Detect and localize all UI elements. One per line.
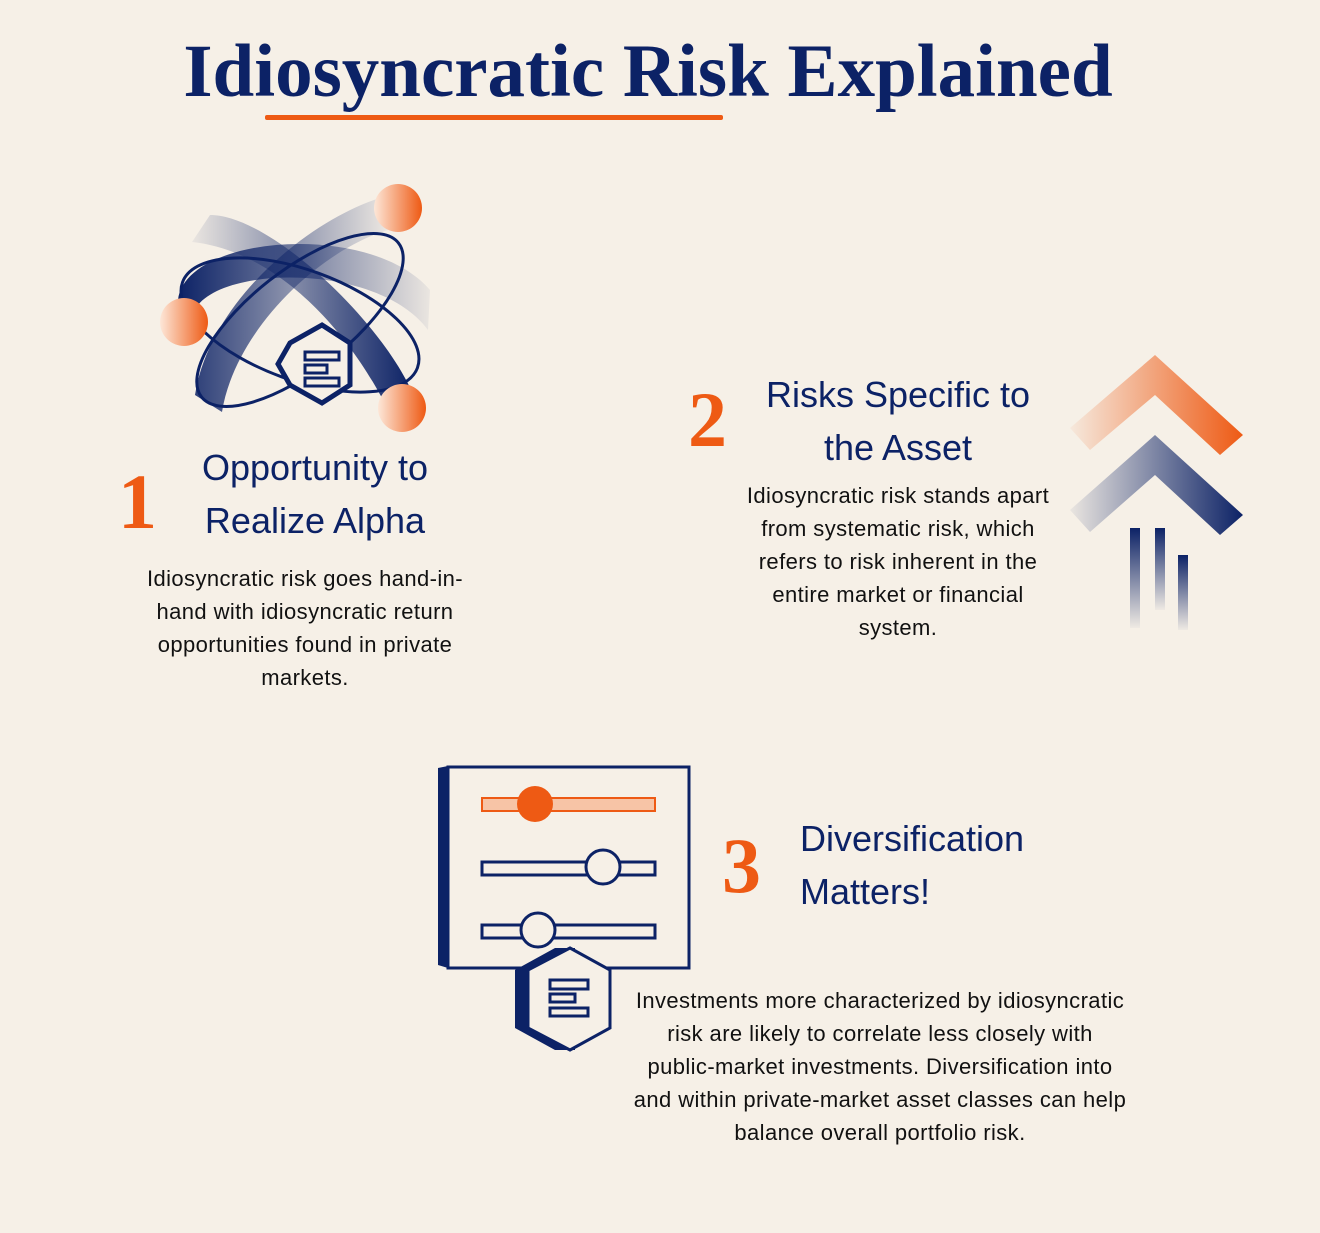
- title underline: [265, 115, 723, 120]
- text 2: entire market or financial: [772, 582, 1024, 607]
- icon: sliders panel: [438, 766, 690, 1052]
- number 1: 1: [118, 458, 157, 545]
- text 2: Idiosyncratic risk stands apart: [747, 483, 1049, 508]
- number 3: 3: [722, 822, 761, 909]
- icon: chevrons: [1070, 355, 1243, 630]
- icon: atom: [160, 184, 430, 432]
- heading 1: Opportunity to Realize Alpha: [202, 447, 428, 541]
- text 2: from systematic risk, which: [761, 516, 1035, 541]
- text 1: hand with idiosyncratic return: [157, 599, 453, 624]
- text 2: [747, 483, 1049, 640]
- text 2: refers to risk inherent in the: [759, 549, 1037, 574]
- text 1: opportunities found in private: [158, 632, 452, 657]
- text 1: markets.: [261, 665, 349, 690]
- heading 2: Risks Specific to the Asset: [766, 374, 1030, 468]
- text 3: risk are likely to correlate less closely with: [667, 1021, 1093, 1046]
- number 2: 2: [688, 376, 727, 463]
- text 3: balance overall portfolio risk.: [734, 1120, 1026, 1145]
- text 1: [147, 566, 463, 690]
- text 3: Investments more characterized by idiosyncratic: [636, 988, 1124, 1013]
- heading 3: Diversification Matters!: [800, 818, 1024, 912]
- text 3: [634, 988, 1126, 1145]
- text 1: Idiosyncratic risk goes hand-in-: [147, 566, 463, 591]
- title: Idiosyncratic Risk Explained: [183, 30, 1113, 113]
- text 3: and within private-market asset classes can help: [634, 1087, 1126, 1112]
- text 2: system.: [859, 615, 937, 640]
- text 3: public-market investments. Diversification into: [647, 1054, 1113, 1079]
